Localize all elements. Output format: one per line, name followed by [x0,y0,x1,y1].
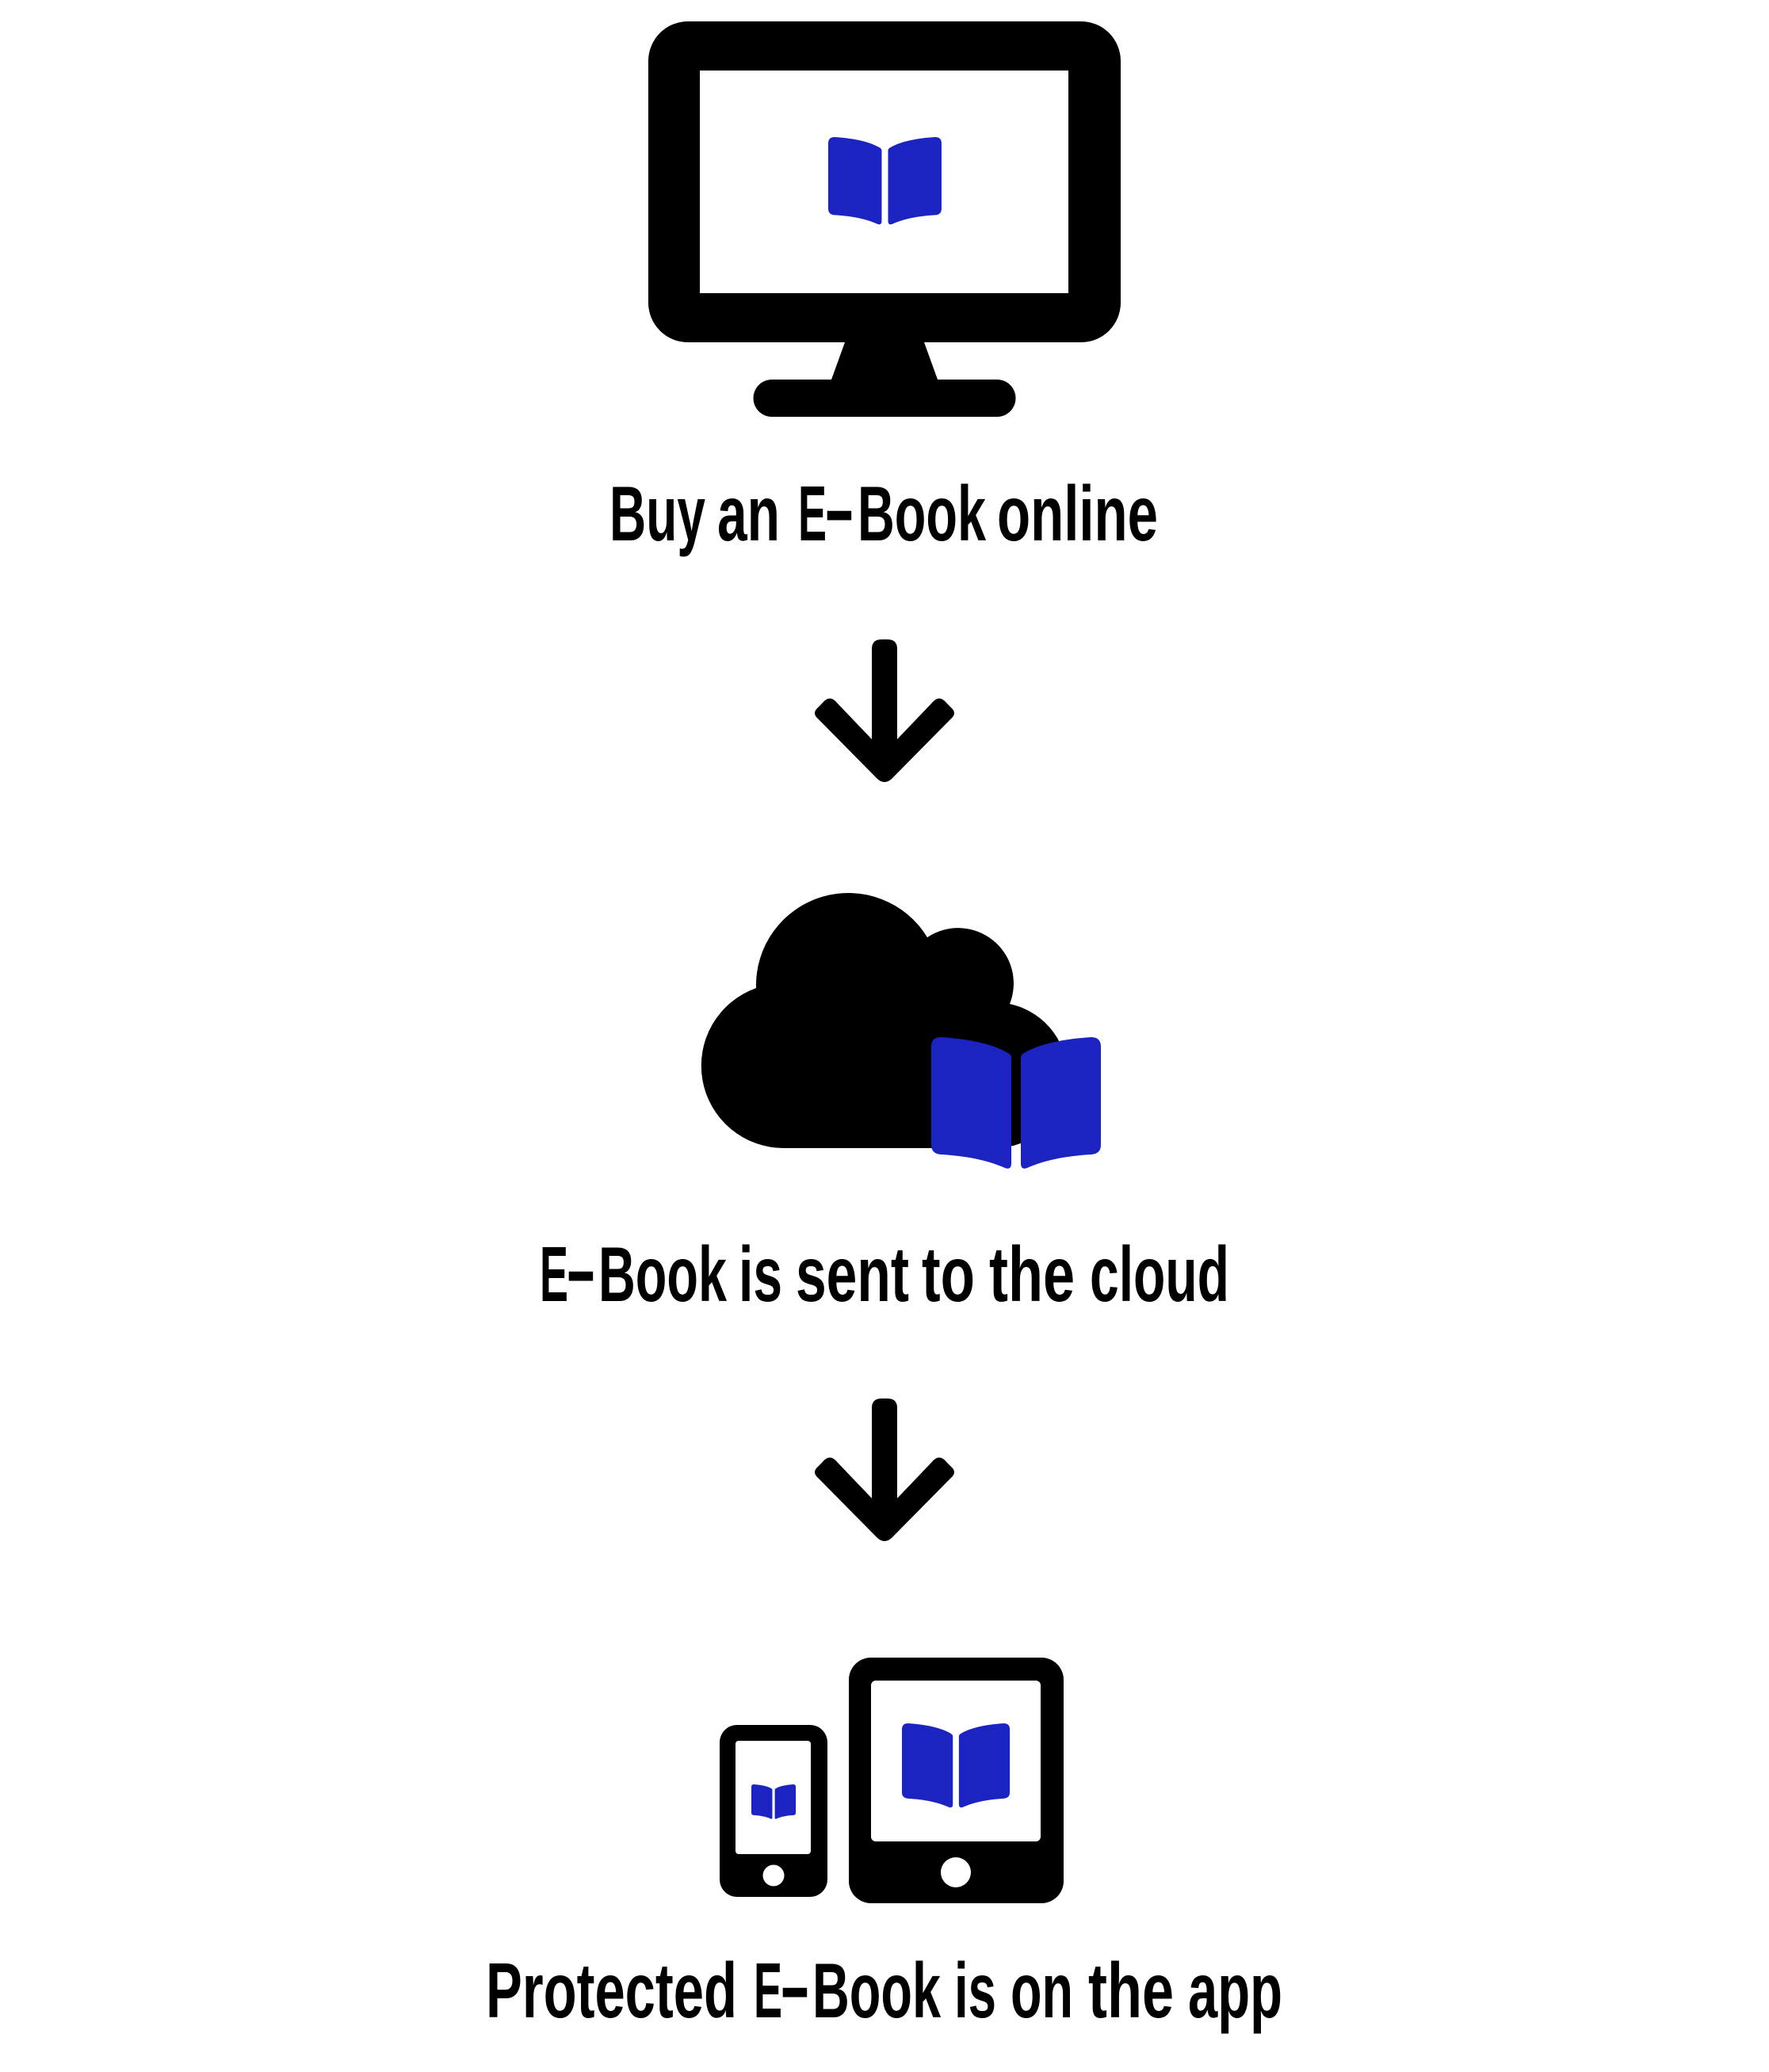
heading: e-book is sent to the cloud: the [989,1231,1075,1318]
heading: protected e-book is on the app: - [779,1942,811,2029]
heading: buy an e-book online: Buy [609,470,705,557]
icon: book on phone [751,1784,796,1819]
icon: book on tablet [902,1723,1010,1807]
icon: book on monitor [828,137,942,224]
arrow 2 [815,1399,954,1541]
icon: desktop monitor [648,21,1121,417]
heading: e-book is sent to the cloud: Book [598,1231,727,1318]
step 3: protected on app [486,1658,1282,2034]
heading: e-book is sent to the cloud: to [922,1231,975,1318]
icon: book on cloud [931,1037,1101,1169]
heading: buy an e-book online: - [823,465,855,552]
heading: protected e-book is on the app: Book [812,1947,941,2034]
icon: cloud [701,893,1068,1148]
heading: protected e-book is on the app: on [1011,1947,1073,2034]
heading: buy an e-book online: Book [858,470,986,557]
heading: protected e-book is on the app: E [754,1947,782,2034]
heading: e-book is sent to the cloud: E [540,1231,568,1318]
step 1: buy online [609,21,1158,557]
heading: buy an e-book online: online [997,470,1158,557]
heading: protected e-book is on the app: app [1188,1947,1282,2034]
icon: phone [720,1725,827,1897]
heading: protected e-book is on the app: Protected [486,1947,737,2034]
heading: buy an e-book online: an [717,470,780,557]
heading: protected e-book is on the app: the [1088,1947,1174,2034]
heading: buy an e-book online: E [798,470,827,557]
heading: protected e-book is on the app: is [954,1947,996,2034]
heading: e-book is sent to the cloud: cloud [1090,1231,1229,1318]
step 2: sent to cloud [540,893,1229,1318]
icon: tablet [849,1658,1064,1903]
heading: e-book is sent to the cloud: - [565,1226,597,1313]
arrow 1 [815,639,954,782]
heading: e-book is sent to the cloud: sent [796,1231,909,1318]
heading: e-book is sent to the cloud: is [739,1231,782,1318]
